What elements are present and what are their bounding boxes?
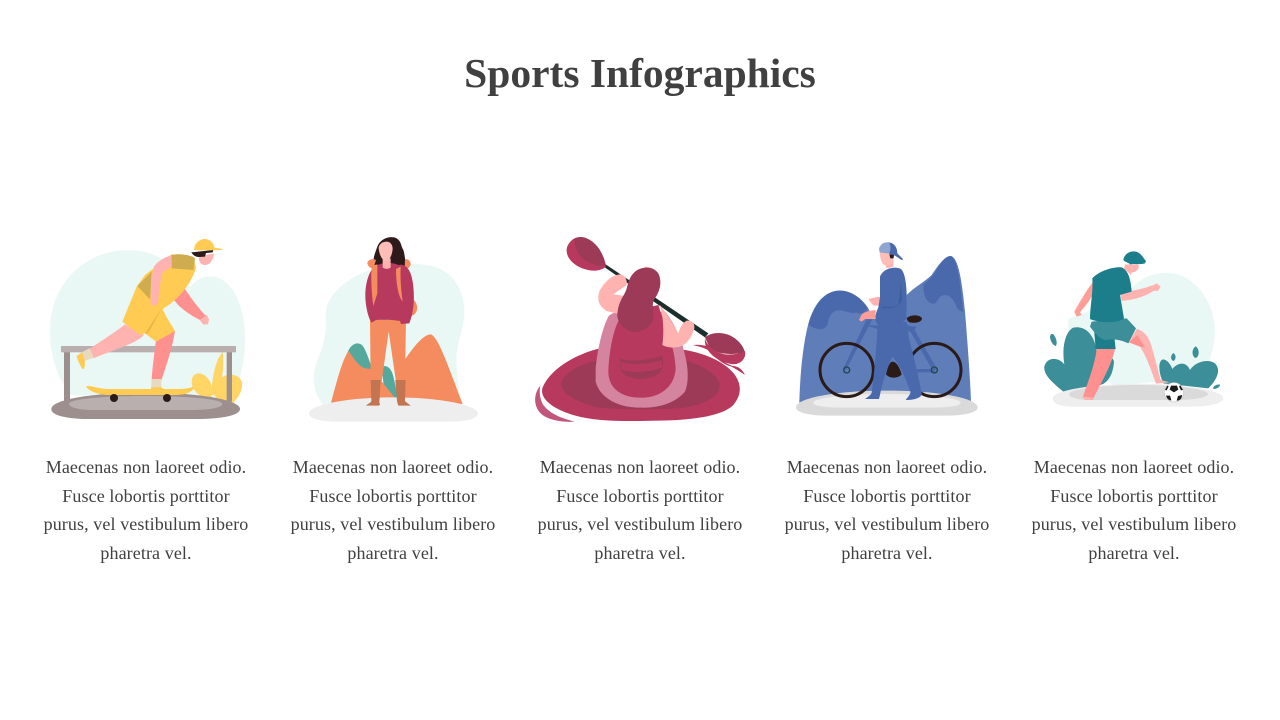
text block: column 1: Fusce lobortis porttitor — [62, 486, 230, 506]
text block: column 4: purus, vel vestibulum libero — [785, 514, 989, 534]
text block: column 5: Maecenas non laoreet odio. — [1034, 457, 1234, 477]
text block: column 4: Fusce lobortis porttitor — [803, 486, 971, 506]
text block: column 3: purus, vel vestibulum libero — [538, 514, 742, 534]
title: Sports Infographics — [464, 50, 816, 96]
text block: column 3 — [538, 457, 742, 563]
text block: column 3: Maecenas non laoreet odio. — [540, 457, 740, 477]
text block: column 5: Fusce lobortis porttitor — [1050, 486, 1218, 506]
text block: column 2: pharetra vel. — [347, 543, 439, 563]
text block: column 2 — [290, 457, 495, 563]
text block: column 2: Maecenas non laoreet odio. — [293, 457, 493, 477]
text block: column 5 — [1032, 457, 1236, 563]
text block: column 3: Fusce lobortis porttitor — [556, 486, 724, 506]
text block: column 4: pharetra vel. — [841, 543, 933, 563]
illustration: skateboarder — [50, 239, 245, 419]
text block: column 4 — [784, 457, 989, 563]
illustration: hiker — [309, 237, 478, 422]
text block: column 5: purus, vel vestibulum libero — [1032, 514, 1236, 534]
text block: column 4: Maecenas non laoreet odio. — [787, 457, 987, 477]
text block: column 1 — [44, 457, 248, 563]
text block: column 1: Maecenas non laoreet odio. — [46, 457, 246, 477]
text block: column 1: pharetra vel. — [100, 543, 192, 563]
text block: column 2: Fusce lobortis porttitor — [309, 486, 477, 506]
text block: column 1: purus, vel vestibulum libero — [44, 514, 248, 534]
text block: column 3: pharetra vel. — [594, 543, 686, 563]
text block: column 2: purus, vel vestibulum libero — [291, 514, 495, 534]
illustration: soccer player — [1044, 251, 1223, 407]
text block: column 5: pharetra vel. — [1088, 543, 1180, 563]
icon: soccer ball — [1164, 383, 1184, 402]
illustration: kayaker — [535, 237, 745, 422]
illustration: cyclist — [796, 242, 978, 416]
